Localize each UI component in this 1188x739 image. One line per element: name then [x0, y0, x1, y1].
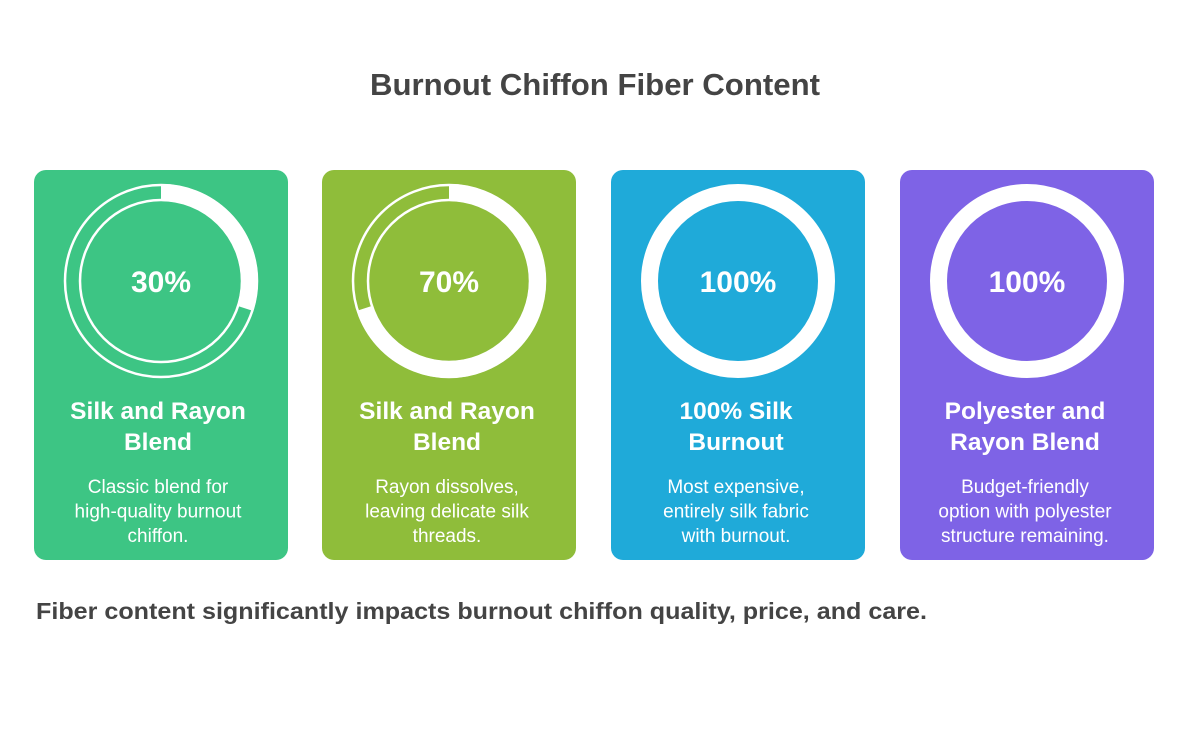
- heading: 100% Silk: [679, 398, 793, 425]
- panel: silk and rayon 70%: [322, 170, 576, 560]
- ring chart 100%: 100%: [700, 266, 776, 299]
- description: leaving delicate silk: [365, 502, 529, 522]
- heading: Silk and Rayon: [359, 398, 535, 425]
- heading: Silk and Rayon: [70, 398, 246, 425]
- heading: Blend: [124, 429, 192, 456]
- ring chart 100%: [938, 192, 1116, 370]
- ring chart 100%: 100%: [989, 266, 1065, 299]
- ring chart 70%: 70%: [419, 266, 479, 299]
- heading: Polyester and: [945, 398, 1105, 425]
- ring chart 100%: [650, 192, 826, 370]
- description: chiffon.: [128, 526, 188, 547]
- panel: silk and rayon 30%: [34, 170, 288, 560]
- title: Burnout Chiffon Fiber Content: [370, 67, 820, 102]
- description: Budget-friendly: [961, 477, 1089, 498]
- heading: Rayon Blend: [950, 429, 1100, 456]
- description: Most expensive,: [667, 477, 805, 498]
- ring chart 30%: 30%: [131, 266, 191, 299]
- footer summary: Fiber content significantly impacts burnout chiffon quality, price, and care.: [36, 598, 927, 624]
- description: threads.: [413, 526, 481, 547]
- description: structure remaining.: [941, 526, 1109, 547]
- panel: polyester and rayon: [900, 170, 1154, 560]
- description: Classic blend for: [88, 477, 229, 498]
- description: with burnout.: [681, 526, 790, 547]
- ring chart 30%: [65, 185, 257, 377]
- ring chart 70%: [353, 185, 545, 377]
- panel: 100% silk: [611, 170, 865, 560]
- description: high-quality burnout: [75, 502, 242, 522]
- heading: Burnout: [688, 429, 784, 456]
- heading: Blend: [413, 429, 481, 456]
- description: entirely silk fabric: [663, 502, 809, 522]
- description: option with polyester: [938, 502, 1112, 522]
- description: Rayon dissolves,: [375, 477, 519, 498]
